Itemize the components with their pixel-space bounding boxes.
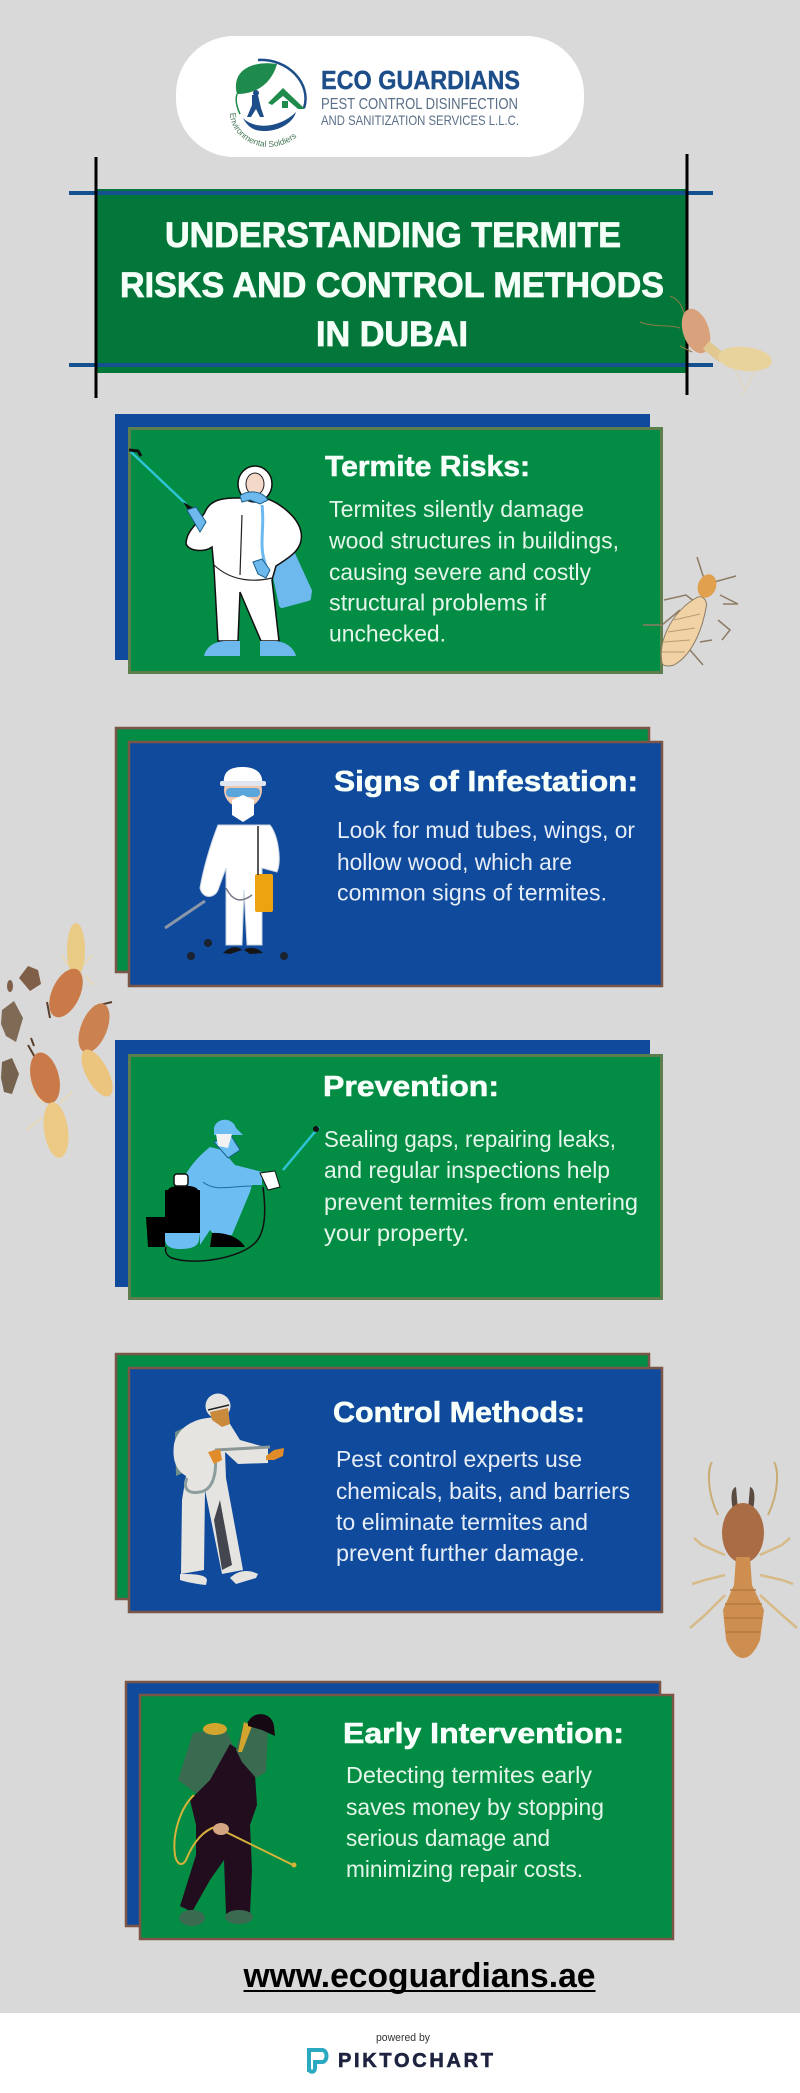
panel body text: and regular inspections help	[324, 1157, 610, 1183]
icon: eco guardians emblem: Environmental Soldiers	[230, 113, 296, 147]
panel: control methods	[116, 1354, 662, 1612]
icon: eco guardians emblem	[230, 58, 307, 147]
panel body text	[336, 1446, 630, 1566]
logo wordmark: AND SANITIZATION SERVICES L.L.C.	[321, 112, 519, 128]
panel body text: Detecting termites early	[346, 1762, 593, 1788]
panel body text: chemicals, baits, and barriers	[336, 1478, 630, 1504]
panel body text	[346, 1762, 604, 1882]
panel heading: Termite Risks:	[325, 451, 530, 483]
panel body text: causing severe and costly	[329, 559, 591, 585]
panel: prevention	[115, 1040, 662, 1298]
title text: UNDERSTANDING TERMITE	[165, 216, 621, 255]
logo pill	[176, 36, 584, 157]
panel body text: saves money by stopping	[346, 1794, 604, 1820]
illustration: worker with orange tank	[165, 767, 288, 960]
panel body text: serious damage and	[346, 1825, 550, 1851]
panel body text: Termites silently damage	[329, 496, 584, 522]
panel body text: Pest control experts use	[336, 1446, 582, 1472]
logo wordmark: PEST CONTROL DISINFECTION	[321, 96, 518, 113]
panel body text: wood structures in buildings,	[328, 528, 619, 554]
panel: signs of infestation	[116, 728, 662, 986]
icon: large termite right	[690, 1462, 797, 1658]
panel heading: Prevention:	[323, 1071, 499, 1103]
icon: piktochart logo	[309, 2050, 326, 2072]
title banner	[69, 154, 713, 398]
icon: termite beside first panel	[643, 557, 738, 666]
panel body text: prevent further damage.	[336, 1540, 585, 1566]
panel body text: your property.	[324, 1220, 469, 1246]
panel body text: prevent termites from entering	[324, 1189, 638, 1215]
title text	[120, 216, 664, 354]
panel body text	[328, 496, 619, 646]
logo wordmark: ECO GUARDIANS	[321, 65, 520, 95]
panel body text: common signs of termites.	[337, 880, 607, 906]
panel heading: Early Intervention:	[343, 1718, 624, 1750]
panel body text: Look for mud tubes, wings, or	[337, 817, 635, 843]
title text: RISKS AND CONTROL METHODS	[120, 266, 664, 305]
icon: termite cluster left	[1, 923, 119, 1159]
panel body text: structural problems if	[329, 590, 547, 616]
panel: termite risks	[115, 414, 662, 672]
title text: IN DUBAI	[316, 315, 468, 354]
logo wordmark	[321, 65, 520, 128]
panel heading: Control Methods:	[333, 1397, 585, 1429]
illustration: worker with green backpack	[174, 1714, 296, 1926]
panel body text: Sealing gaps, repairing leaks,	[324, 1126, 616, 1152]
panel body text: unchecked.	[329, 620, 446, 646]
illustration: kneeling worker with tank	[146, 1120, 319, 1261]
panel body text	[337, 817, 635, 906]
illustration: worker in white suit with sprayer	[129, 450, 309, 656]
panel heading: Signs of Infestation:	[334, 766, 638, 798]
panel body text: to eliminate termites and	[336, 1509, 588, 1535]
panel body text: minimizing repair costs.	[346, 1856, 583, 1882]
panel body text: hollow wood, which are	[337, 849, 572, 875]
illustration: worker in grey suit spraying	[174, 1394, 284, 1585]
footer bar	[0, 2013, 800, 2093]
website link: www.ecoguardians.ae	[243, 1957, 595, 1995]
powered by label: powered by	[376, 2032, 430, 2044]
panel body text	[324, 1126, 638, 1246]
panel: early intervention	[126, 1682, 673, 1939]
icon: termite top right	[640, 296, 773, 395]
piktochart wordmark: PIKTOCHART	[338, 2050, 493, 2072]
